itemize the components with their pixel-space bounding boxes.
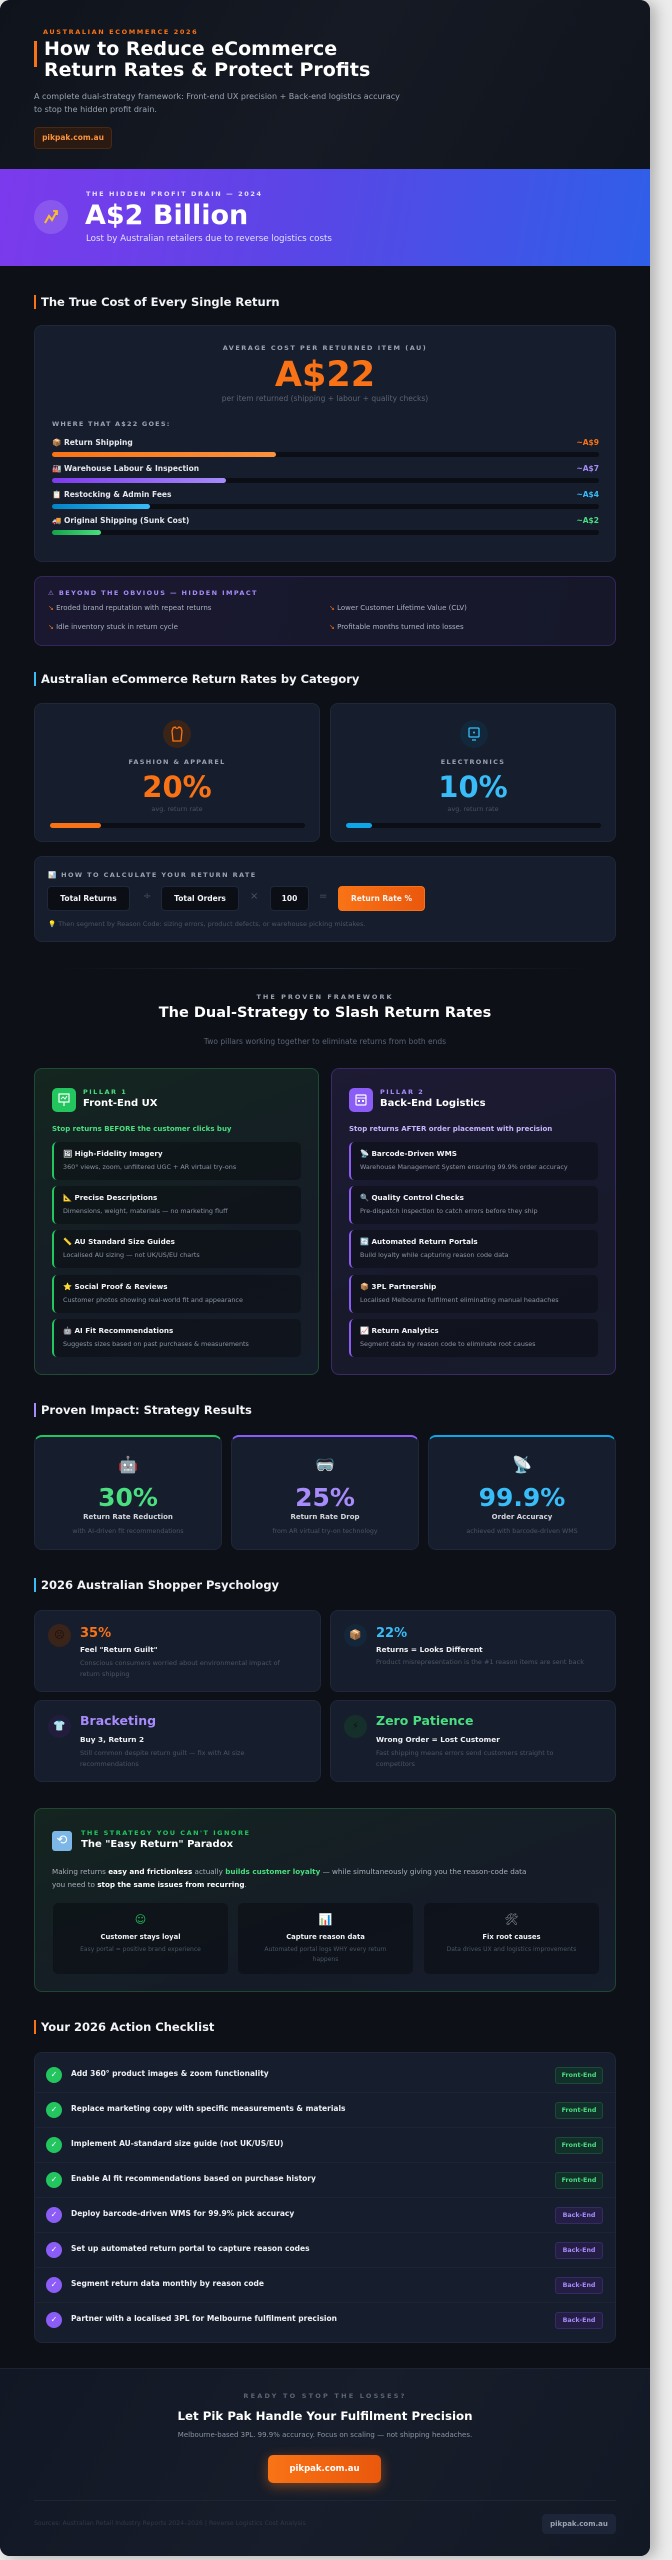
- stat: 99.9%: achieved with barcode-driven WMS: [466, 1528, 578, 1535]
- formula: [47, 886, 425, 911]
- item: AI fit: 🤖 AI Fit Recommendations: [63, 1326, 173, 1335]
- bar: return shipping: ~A$9: [576, 438, 599, 447]
- panel: checklist: Set up automated return portal to capture reason codes: [71, 2244, 310, 2253]
- item: WMS: Warehouse Management System ensuring 99.9% order accuracy: [360, 1163, 568, 1171]
- bar: original shipping: ~A$2: [576, 516, 599, 525]
- panel: checklist: Enable AI fit recommendations based on purchase history: [71, 2174, 316, 2183]
- panel: pillar 2 back-end logistics: [331, 1068, 616, 1375]
- item: social proof: [52, 1275, 301, 1313]
- formula: Return Rate %: [351, 894, 412, 903]
- banner figure: A$2 Billion: [85, 200, 248, 231]
- panel: checklist: Implement AU-standard size guide (not UK/US/EU): [71, 2139, 283, 2148]
- item: analytics: [349, 1319, 598, 1357]
- panel: checklist: ✓: [51, 2315, 57, 2324]
- breakdown label: WHERE THAT A$22 GOES:: [52, 420, 170, 428]
- item: 3PL: [349, 1275, 598, 1313]
- stat: 99.9%: 📡: [512, 1455, 532, 1474]
- bar: original shipping: [52, 516, 599, 535]
- framework heading: THE PROVEN FRAMEWORK: [256, 993, 394, 1001]
- item: QC: Pre-dispatch inspection to catch errors before they ship: [360, 1207, 538, 1215]
- item: social proof: Customer photos showing real-world fit and appearance: [63, 1296, 243, 1304]
- formula: =: [319, 891, 327, 902]
- item: return portals: Build loyalty while capturing reason code data: [360, 1251, 508, 1259]
- step: loyal: [53, 1903, 228, 1974]
- psych card: return guilt: return shipping: [80, 1670, 130, 1678]
- panel: hidden impact: [34, 576, 616, 646]
- panel: checklist: ✓: [51, 2245, 57, 2254]
- impact item: ↘ Idle inventory stuck in return cycle: [48, 623, 178, 631]
- panel: pillar 1 front-end UX: Front-End UX: [83, 1098, 157, 1109]
- footer CTA: [0, 2368, 650, 2556]
- step: fix root causes: Fix root causes: [482, 1933, 541, 1941]
- impact item: ↘ Lower Customer Lifetime Value (CLV): [329, 604, 467, 612]
- pillar icon: [52, 1088, 76, 1112]
- psych card: zero patience: ⚡: [352, 1721, 359, 1732]
- panel: checklist: Back-End: [563, 2317, 595, 2324]
- step: capture data: [238, 1903, 413, 1974]
- stat: 25%: 🥽: [315, 1455, 335, 1474]
- panel: pillar 1 front-end UX: PILLAR 1: [83, 1088, 127, 1096]
- eyebrow label: AUSTRALIAN ECOMMERCE 2026: [43, 28, 198, 36]
- item: WMS: 📡 Barcode-Driven WMS: [360, 1149, 457, 1158]
- bar: original shipping: 🚚 Original Shipping (Sunk Cost): [52, 516, 189, 525]
- title: Return Rates & Protect Profits: [44, 59, 370, 81]
- psych card: looks different: 22%: [376, 1626, 407, 1641]
- psych card: zero patience: Wrong Order = Lost Customer: [376, 1735, 500, 1744]
- hidden impact title: ⚠ BEYOND THE OBVIOUS — HIDDEN IMPACT: [48, 589, 258, 597]
- panel: checklist: Back-End: [563, 2212, 595, 2219]
- panel: electronics: [330, 703, 616, 842]
- bar: warehouse labour: [52, 464, 599, 483]
- heading: proven impact: Proven Impact: Strategy Results: [41, 1403, 252, 1417]
- panel: calculator: [34, 856, 616, 942]
- psych card: return guilt: 35%: [80, 1626, 111, 1641]
- paradox text: you need to stop the same issues from recurring.: [52, 1880, 247, 1889]
- subtitle: to stop the hidden profit drain.: [34, 105, 157, 114]
- panel: fashion: [34, 703, 320, 842]
- formula: Total Orders: [174, 894, 226, 903]
- subtitle: [34, 92, 400, 114]
- framework heading: Two pillars working together to eliminate returns from both ends: [204, 1037, 446, 1046]
- panel: pillar 1 front-end UX: [34, 1068, 319, 1375]
- banner subtext: Lost by Australian retailers due to reverse logistics costs: [86, 234, 332, 244]
- stat: 25%: [231, 1435, 419, 1550]
- bar: restocking: [52, 490, 599, 509]
- sources: Sources: Australian Retail Industry Reports 2024–2026 | Reverse Logistics Cost Analysis: [34, 2520, 306, 2527]
- big cost: A$22: [275, 355, 375, 395]
- bar: return shipping: [52, 438, 599, 457]
- framework heading: [158, 993, 491, 1046]
- item: QC: 🔍 Quality Control Checks: [360, 1193, 464, 1202]
- item: return portals: 🔄 Automated Return Portals: [360, 1237, 478, 1246]
- banner: hidden profit drain: [0, 169, 650, 266]
- psych card: bracketing: [34, 1700, 321, 1782]
- psych card: bracketing: recommendations: [80, 1760, 139, 1768]
- banner label: THE HIDDEN PROFIT DRAIN — 2024: [86, 190, 263, 198]
- item: WMS: [349, 1142, 598, 1180]
- psych card: looks different: Returns = Looks Different: [376, 1645, 483, 1654]
- calculator title: 📊 HOW TO CALCULATE YOUR RETURN RATE: [48, 871, 257, 879]
- panel: checklist: Segment return data monthly by reason code: [71, 2279, 264, 2288]
- item: QC: [349, 1186, 598, 1224]
- stat: 30%: 30%: [98, 1483, 158, 1512]
- psych card: return guilt: [34, 1610, 321, 1692]
- psych card: bracketing: Buy 3, Return 2: [80, 1735, 144, 1744]
- heading: shopper psychology: 2026 Australian Shopper Psychology: [41, 1578, 279, 1592]
- panel: easy return paradox: [34, 1808, 616, 1992]
- item: descriptions: 📐 Precise Descriptions: [63, 1193, 157, 1202]
- category label: FASHION & APPAREL: [128, 758, 226, 766]
- bar: restocking: ~A$4: [576, 490, 599, 499]
- panel: easy return paradox: The "Easy Return" Paradox: [81, 1839, 233, 1850]
- step: fix root causes: 🛠: [505, 1913, 518, 1926]
- panel: pillar 1 front-end UX: Stop returns BEFORE the customer clicks buy: [52, 1125, 231, 1133]
- panel: checklist: ✓: [51, 2280, 57, 2289]
- panel: checklist: Back-End: [563, 2247, 595, 2254]
- step: capture data: Capture reason data: [286, 1933, 365, 1941]
- item: return portals: [349, 1230, 598, 1268]
- psych card: zero patience: Zero Patience: [376, 1713, 473, 1728]
- step: loyal: Customer stays loyal: [100, 1933, 181, 1941]
- panel: checklist: [34, 2052, 616, 2343]
- formula: ×: [250, 891, 258, 902]
- category label: ELECTRONICS: [441, 758, 505, 766]
- icon: cycle: [52, 1831, 72, 1851]
- item: size guides: Localised AU sizing — not UK/US/EU charts: [63, 1251, 200, 1259]
- stat: 25%: from AR virtual try-on technology: [272, 1528, 378, 1535]
- impact item: ↘ Eroded brand reputation with repeat returns: [48, 604, 211, 612]
- rate note: avg. return rate: [151, 805, 203, 813]
- stat: 25%: 25%: [295, 1483, 355, 1512]
- formula: Total Returns: [60, 894, 117, 903]
- item: AI fit: [52, 1319, 301, 1357]
- CTA title: Let Pik Pak Handle Your Fulfilment Precision: [177, 2409, 473, 2423]
- header button: pikpak.com.au: [42, 133, 104, 142]
- stat: 25%: Return Rate Drop: [290, 1513, 360, 1521]
- panel: cost breakdown: [34, 325, 616, 562]
- bar: restocking: 📋 Restocking & Admin Fees: [52, 490, 171, 499]
- panel: pillar 2 back-end logistics: PILLAR 2: [380, 1088, 424, 1096]
- pillar icon: [349, 1088, 373, 1112]
- panel: checklist: Deploy barcode-driven WMS for 99.9% pick accuracy: [71, 2209, 294, 2218]
- CTA button: [268, 2455, 381, 2483]
- item: imagery: 360° views, zoom, unfiltered UGC + AR virtual try-ons: [63, 1163, 236, 1171]
- icon: shirt: [163, 720, 191, 748]
- icon: cycle: ⟲: [57, 1833, 67, 1848]
- panel: checklist: ✓: [51, 2140, 57, 2149]
- footer chip: [542, 2514, 616, 2534]
- item: 3PL: 📦 3PL Partnership: [360, 1282, 436, 1291]
- stat: 30%: Return Rate Reduction: [83, 1513, 173, 1521]
- panel: checklist: Back-End: [563, 2282, 595, 2289]
- item: analytics: 📈 Return Analytics: [360, 1326, 439, 1335]
- bar: return shipping: 📦 Return Shipping: [52, 438, 133, 447]
- category rate: 20%: [142, 770, 212, 804]
- panel: checklist: Front-End: [562, 2177, 596, 2184]
- psych card: looks different: 📦: [349, 1630, 362, 1641]
- step: fix root causes: Data drives UX and logistics improvements: [447, 1946, 576, 1953]
- psych card: bracketing: 👕: [53, 1721, 66, 1732]
- item: descriptions: [52, 1186, 301, 1224]
- item: AI fit: Suggests sizes based on past purchases & measurements: [63, 1340, 249, 1348]
- cost label: AVERAGE COST PER RETURNED ITEM (AU): [223, 344, 427, 352]
- item: descriptions: Dimensions, weight, materials — no marketing fluff: [63, 1207, 228, 1215]
- panel: checklist: Front-End: [562, 2107, 596, 2114]
- paradox text: Making returns easy and frictionless actually builds customer loyalty — while simultaneously giving you the reason-code data: [52, 1867, 526, 1876]
- stat: 99.9%: [428, 1435, 616, 1550]
- psych card: looks different: Product misrepresentation is the #1 reason items are sent back: [376, 1658, 584, 1666]
- heading: action checklist: Your 2026 Action Checklist: [41, 2020, 214, 2034]
- bar: warehouse labour: 🏭 Warehouse Labour & Inspection: [52, 464, 199, 473]
- stat: 30%: 🤖: [118, 1455, 138, 1474]
- psych card: return guilt: Feel "Return Guilt": [80, 1645, 158, 1654]
- psych card: return guilt: Conscious consumers worried about environmental impact of: [80, 1659, 280, 1667]
- category rate: 10%: [438, 770, 508, 804]
- psych card: zero patience: [330, 1700, 616, 1782]
- header: [0, 0, 650, 169]
- panel: checklist: Front-End: [562, 2072, 596, 2079]
- icon: trend chart: [34, 200, 68, 234]
- title: How to Reduce eCommerce: [44, 38, 337, 60]
- heading: return rates by category: Australian eCommerce Return Rates by Category: [41, 672, 359, 686]
- stat: 30%: [34, 1435, 222, 1550]
- psych card: zero patience: competitors: [376, 1760, 415, 1768]
- step: capture data: Automated portal logs WHY every return: [264, 1946, 387, 1953]
- panel: checklist: ✓: [51, 2105, 57, 2114]
- panel: checklist: Replace marketing copy with specific measurements & materials: [71, 2104, 346, 2113]
- stat: 30%: with AI-driven fit recommendations: [72, 1528, 184, 1535]
- panel: checklist: ✓: [51, 2210, 57, 2219]
- panel: checklist: Partner with a localised 3PL for Melbourne fulfilment precision: [71, 2314, 337, 2323]
- psych card: bracketing: Bracketing: [80, 1713, 156, 1728]
- item: size guides: [52, 1230, 301, 1268]
- item: social proof: ⭐ Social Proof & Reviews: [63, 1282, 168, 1291]
- panel: easy return paradox: THE STRATEGY YOU CAN'T IGNORE: [81, 1829, 250, 1837]
- header button: [34, 127, 112, 149]
- icon: monitor: [460, 720, 488, 748]
- item: imagery: 🖼 High-Fidelity Imagery: [63, 1149, 163, 1158]
- step: capture data: 📊: [319, 1913, 332, 1926]
- psych card: bracketing: Still common despite return guilt — fix with AI size: [80, 1749, 244, 1757]
- step: fix root causes: [424, 1903, 599, 1974]
- item: analytics: Segment data by reason code to eliminate root causes: [360, 1340, 535, 1348]
- step: loyal: Easy portal = positive brand experience: [80, 1946, 201, 1953]
- panel: checklist: Front-End: [562, 2142, 596, 2149]
- cost note: per item returned (shipping + labour + quality checks): [222, 394, 428, 403]
- bar: warehouse labour: ~A$7: [576, 464, 599, 473]
- psych card: looks different: [330, 1610, 616, 1692]
- item: size guides: 📏 AU Standard Size Guides: [63, 1237, 175, 1246]
- impact item: ↘ Profitable months turned into losses: [329, 623, 464, 631]
- panel: checklist: ✓: [51, 2175, 57, 2184]
- footer chip: pikpak.com.au: [550, 2520, 608, 2528]
- item: imagery: [52, 1142, 301, 1180]
- paradox text: [52, 1867, 526, 1889]
- CTA button: pikpak.com.au: [289, 2464, 360, 2474]
- step: loyal: ☺: [135, 1913, 146, 1926]
- heading: true cost: The True Cost of Every Single Return: [41, 295, 280, 309]
- footer CTA: Melbourne-based 3PL. 99.9% accuracy. Focus on scaling — not shipping headaches.: [178, 2431, 472, 2439]
- subtitle: A complete dual-strategy framework: Front-end UX precision + Back-end logistics accuracy: [34, 92, 400, 101]
- stat: 99.9%: Order Accuracy: [492, 1513, 552, 1521]
- title: [44, 38, 370, 81]
- item: 3PL: Localised Melbourne fulfilment eliminating manual headaches: [360, 1296, 559, 1304]
- panel: pillar 2 back-end logistics: Stop returns AFTER order placement with precision: [349, 1125, 552, 1133]
- title accent bar: [34, 41, 37, 67]
- panel: checklist: Add 360° product images & zoom functionality: [71, 2069, 269, 2078]
- stat: 99.9%: 99.9%: [479, 1483, 565, 1512]
- panel: checklist: ✓: [51, 2070, 57, 2079]
- psych card: zero patience: Fast shipping means errors send customers straight to: [376, 1749, 553, 1757]
- formula: ÷: [143, 891, 151, 902]
- panel: pillar 2 back-end logistics: Back-End Logistics: [380, 1098, 486, 1109]
- formula: 100: [282, 894, 297, 903]
- footer CTA: READY TO STOP THE LOSSES?: [243, 2392, 407, 2400]
- framework heading: The Dual-Strategy to Slash Return Rates: [159, 1005, 491, 1021]
- rate note: avg. return rate: [447, 805, 499, 813]
- calculator note: 💡 Then segment by Reason Code: sizing errors, product defects, or warehouse picking mistakes.: [48, 920, 365, 928]
- psych card: return guilt: ☹: [54, 1630, 65, 1641]
- step: capture data: happens: [313, 1956, 338, 1963]
